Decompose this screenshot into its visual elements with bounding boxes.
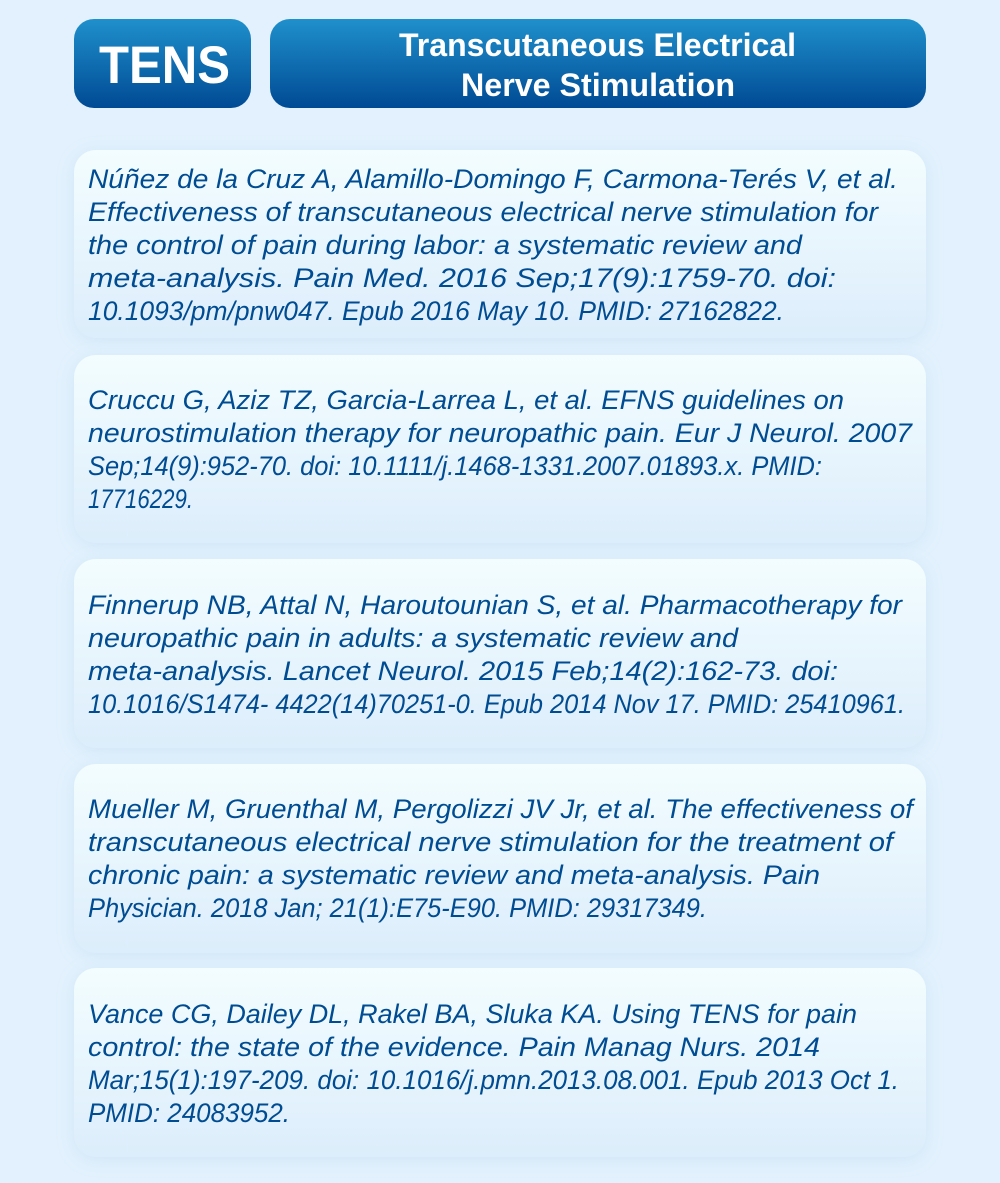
panel: reference 3: 10.1016/S1474- 4422(14)70251-0. Epub 2014 Nov 17. PMID: 25410961.: [88, 689, 905, 719]
panel: reference 2: neurostimulation therapy for neuropathic pain. Eur J Neurol. 2007: [88, 418, 913, 448]
panel: reference 4: Mueller M, Gruenthal M, Pergolizzi JV Jr, et al. The effectiveness of: [88, 794, 916, 824]
panel: reference 1: [74, 150, 926, 338]
panel: reference 1: the control of pain during labor: a systematic review and: [88, 230, 803, 260]
panel: reference 3: Finnerup NB, Attal N, Haroutounian S, et al. Pharmacotherapy for: [88, 590, 903, 620]
panel: reference 2: Cruccu G, Aziz TZ, Garcia-Larrea L, et al. EFNS guidelines on: [88, 385, 844, 415]
panel: reference 5: control: the state of the evidence. Pain Manag Nurs. 2014: [88, 1032, 820, 1062]
panel: reference 2: Sep;14(9):952-70. doi: 10.1111/j.1468-1331.2007.01893.x. PMID:: [88, 451, 822, 481]
title banner: Transcutaneous Electrical Nerve Stimulation: [270, 19, 926, 108]
panel: reference 5: PMID: 24083952.: [88, 1098, 290, 1128]
panel: reference 1: 10.1093/pm/pnw047. Epub 2016 May 10. PMID: 27162822.: [88, 296, 784, 326]
panel: reference 1: meta-analysis. Pain Med. 2016 Sep;17(9):1759-70. doi:: [88, 263, 836, 293]
title banner: Transcutaneous Electrical Nerve Stimulation: Transcutaneous Electrical: [399, 27, 796, 63]
panel: reference 4: transcutaneous electrical nerve stimulation for the treatment of: [88, 827, 896, 857]
panel: reference 5: Vance CG, Dailey DL, Rakel BA, Sluka KA. Using TENS for pain: [88, 999, 857, 1029]
panel: reference 4: [74, 764, 926, 953]
panel: reference 2: [74, 355, 926, 543]
panel: reference 3: meta-analysis. Lancet Neurol. 2015 Feb;14(2):162-73. doi:: [88, 656, 838, 686]
panel: reference 5: [74, 968, 926, 1157]
panel: reference 1: Núñez de la Cruz A, Alamillo-Domingo F, Carmona-Terés V, et al.: [88, 164, 898, 194]
panel: reference 3: [74, 559, 926, 748]
panel: reference 4: chronic pain: a systematic review and meta-analysis. Pain: [88, 860, 820, 890]
badge: TENS: TENS: [99, 36, 230, 95]
panel: reference 4: Physician. 2018 Jan; 21(1):E75-E90. PMID: 29317349.: [88, 893, 707, 923]
title banner: Transcutaneous Electrical Nerve Stimulation: Nerve Stimulation: [461, 67, 735, 103]
panel: reference 1: Effectiveness of transcutaneous electrical nerve stimulation for: [88, 197, 879, 227]
panel: reference 3: neuropathic pain in adults: a systematic review and: [88, 623, 739, 653]
panel: reference 2: 17716229.: [88, 484, 193, 514]
panel: reference 5: Mar;15(1):197-209. doi: 10.1016/j.pmn.2013.08.001. Epub 2013 Oct 1.: [88, 1065, 899, 1095]
badge: TENS: [74, 19, 251, 108]
